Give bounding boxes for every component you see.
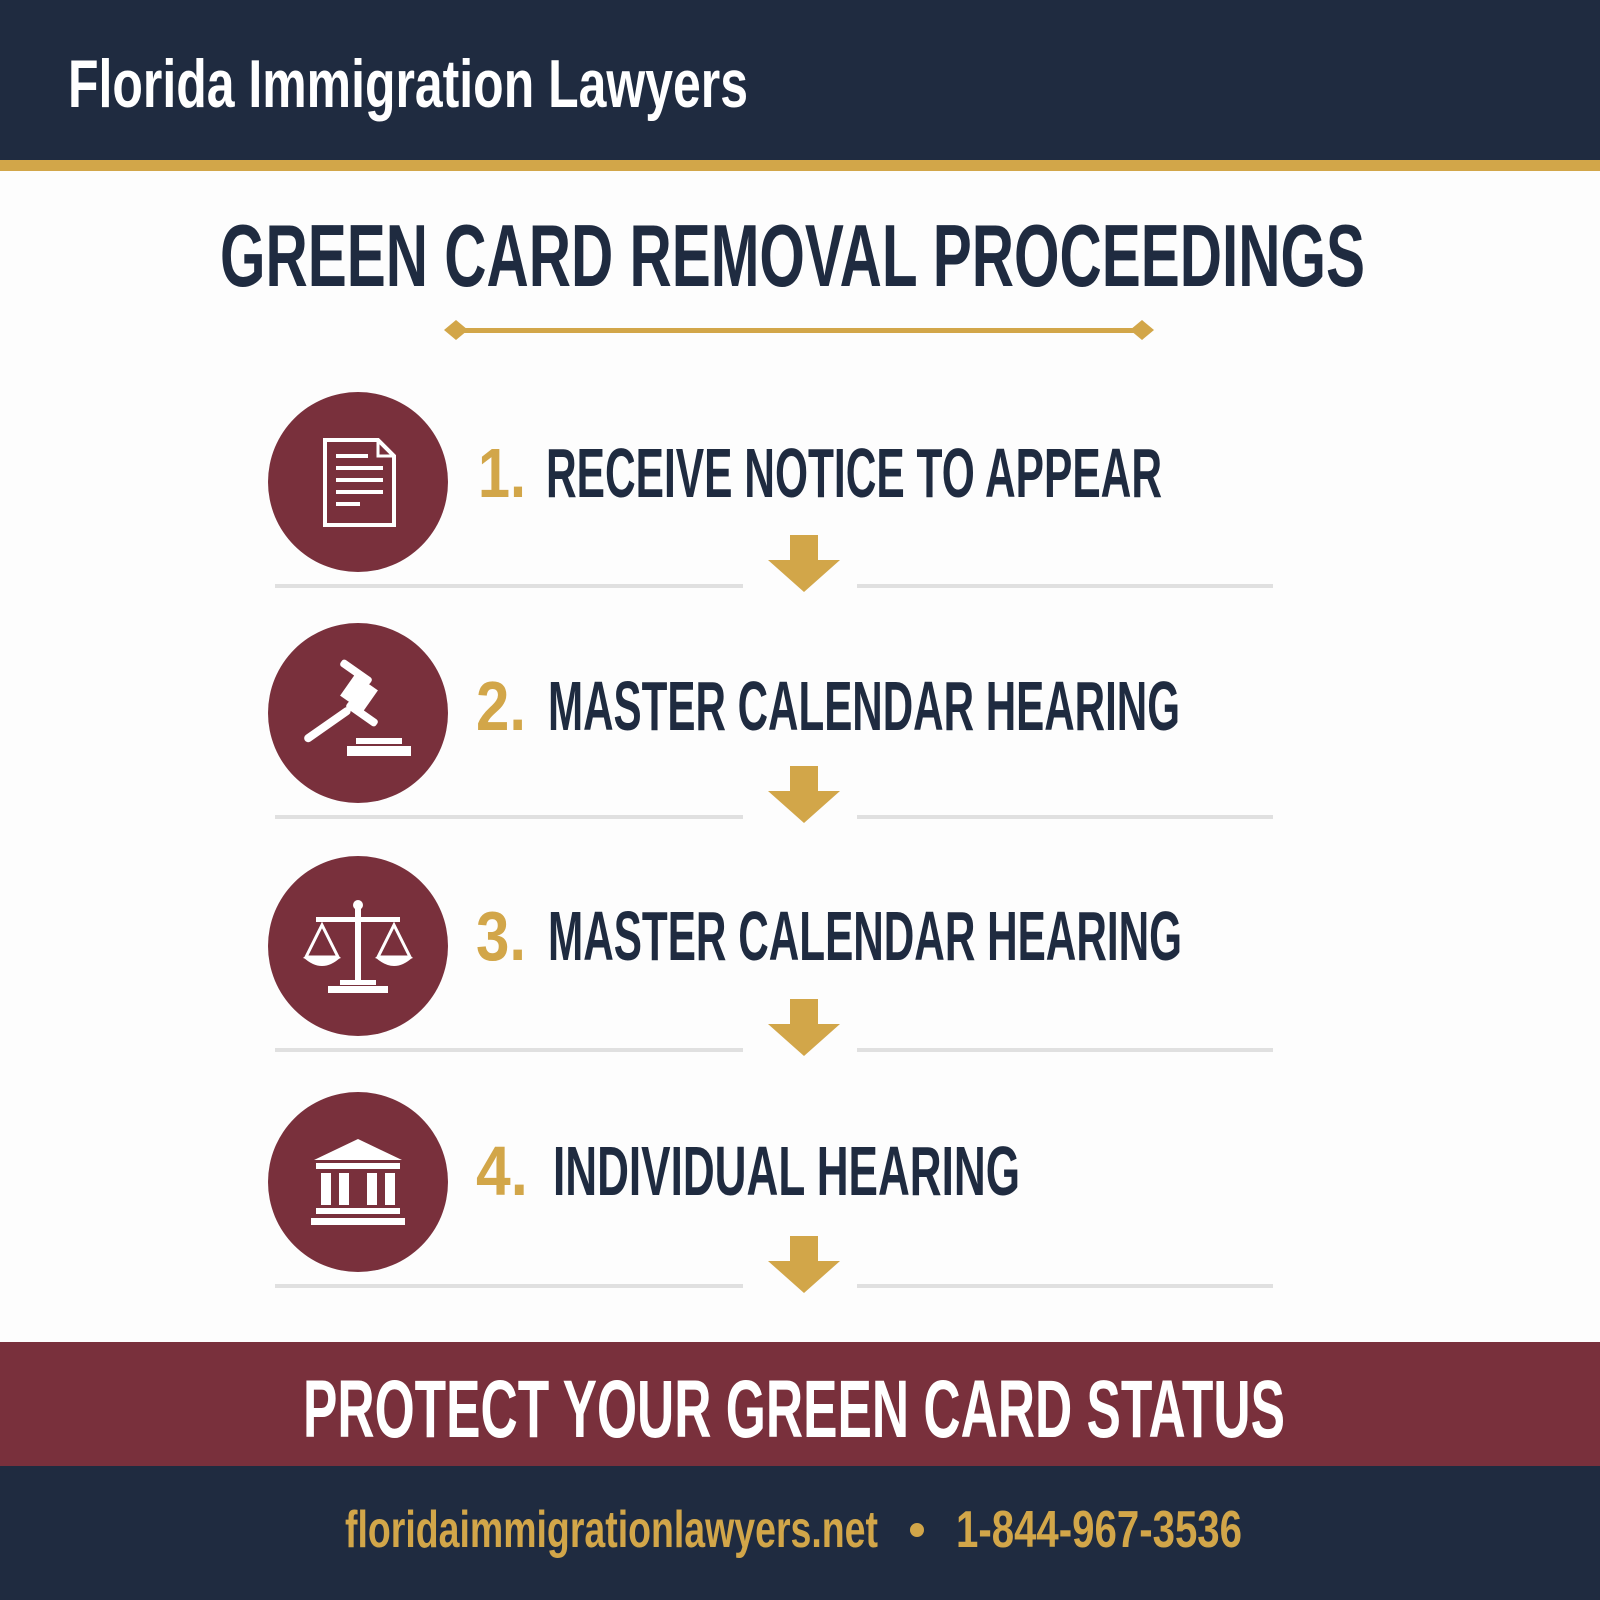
step 1 label: RECEIVE NOTICE TO APPEAR — [546, 434, 1162, 512]
step 1 — [268, 392, 1162, 572]
step 2 label: 2. — [476, 667, 526, 745]
banner: protect status — [0, 1342, 1600, 1466]
footer contact — [0, 1466, 1600, 1600]
icon: gavel — [268, 623, 448, 803]
header title: Florida Immigration Lawyers — [68, 46, 748, 122]
footer contact: floridaimmigrationlawyers.net — [345, 1501, 878, 1559]
step 4 label — [476, 1132, 1020, 1210]
arrow — [768, 999, 840, 1056]
arrow — [768, 1236, 840, 1293]
step 2 — [268, 623, 1180, 803]
icon: document — [268, 392, 448, 572]
separator line 1 with arrow — [275, 535, 1273, 592]
gold divider — [444, 320, 1154, 340]
step 1 label — [478, 434, 1162, 512]
step 4 label: 4. — [476, 1132, 528, 1210]
arrow — [768, 766, 840, 823]
separator line 2 with arrow — [275, 766, 1273, 823]
header bar — [0, 0, 1600, 171]
separator line 4 with arrow — [275, 1236, 1273, 1293]
step 3 label: 3. — [476, 897, 526, 975]
icon: scales — [268, 856, 448, 1036]
footer contact: 1-844-967-3536 — [956, 1501, 1242, 1559]
step 2 label: MASTER CALENDAR HEARING — [548, 667, 1180, 745]
step 1 label: 1. — [478, 434, 526, 512]
arrow — [768, 535, 840, 592]
icon: courthouse — [268, 1092, 448, 1272]
separator line 3 with arrow — [275, 999, 1273, 1056]
step 2 label — [476, 667, 1180, 745]
step 4 — [268, 1092, 1020, 1272]
step 3 label — [476, 897, 1182, 975]
step 4 label: INDIVIDUAL HEARING — [553, 1132, 1020, 1210]
step 3 — [268, 856, 1182, 1036]
step 3 label: MASTER CALENDAR HEARING — [548, 897, 1182, 975]
